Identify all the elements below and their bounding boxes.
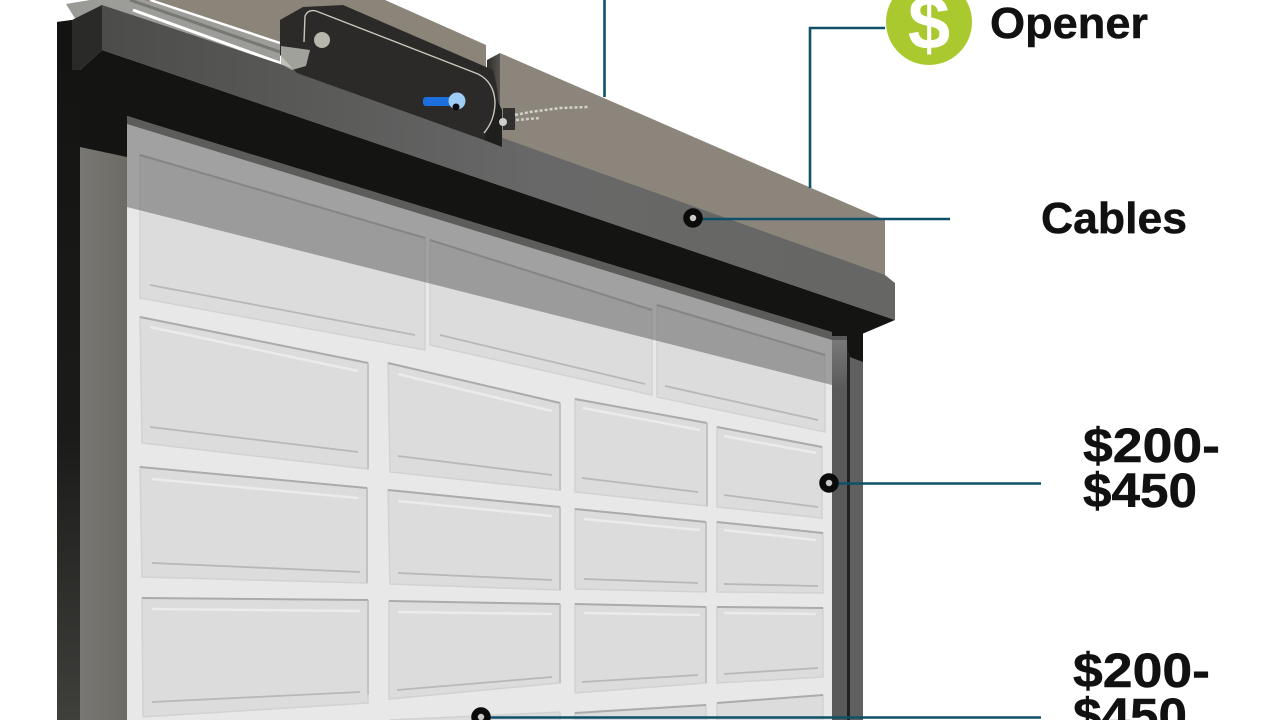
label: opener: Opener bbox=[990, 0, 1148, 48]
black header and left post bbox=[57, 5, 895, 720]
spring and fastener bbox=[499, 107, 588, 130]
leader line to top label bbox=[603, 0, 606, 97]
front fascia band bbox=[102, 5, 895, 320]
row 5 panels bbox=[390, 695, 823, 720]
callout: price range for lower door: $200- bbox=[1073, 645, 1210, 698]
callout: cables bbox=[686, 194, 1187, 243]
row 4 panels bbox=[142, 598, 823, 717]
leader line to opener icon bbox=[810, 28, 885, 188]
callout: price range for door panel: $450 bbox=[1083, 465, 1197, 518]
callout: price range for lower door bbox=[474, 645, 1210, 720]
row 1 panels bbox=[140, 155, 825, 432]
shaded top of door bbox=[127, 122, 832, 385]
blue release handle bbox=[423, 92, 466, 110]
opener bracket bbox=[280, 5, 502, 147]
track rails bbox=[66, 0, 280, 67]
callout: price range for door panel bbox=[822, 420, 1220, 518]
bracket clamp bbox=[281, 46, 310, 70]
bolt bbox=[314, 32, 330, 48]
callout: price range for door panel: $200- bbox=[1083, 420, 1220, 473]
left jamb bbox=[80, 147, 127, 720]
door slab bbox=[127, 116, 832, 720]
row 3 panels bbox=[140, 467, 823, 593]
callout: cables: Cables bbox=[1041, 194, 1187, 243]
row 2 panels bbox=[140, 317, 822, 518]
icon: green dollar badge bbox=[886, 0, 972, 66]
housing: rear tan box bbox=[143, 0, 885, 290]
right post bbox=[832, 330, 863, 720]
